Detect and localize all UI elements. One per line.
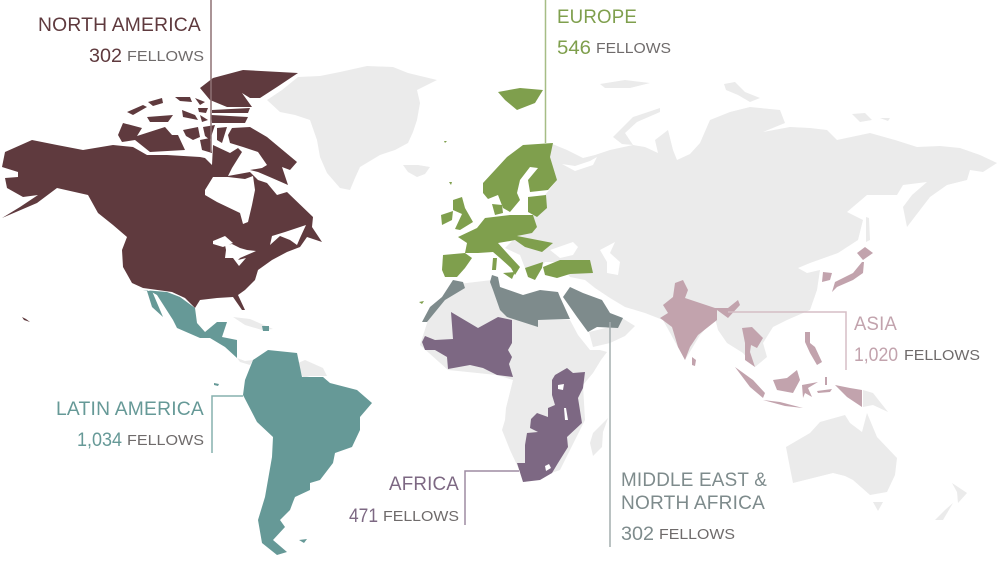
label: Middle East and North Africa xyxy=(621,470,767,545)
North America water bodies xyxy=(205,176,306,266)
label: Asia: 1,020 xyxy=(854,345,898,366)
base map: non-highlighted land xyxy=(233,66,997,520)
region: Latin America xyxy=(143,290,372,555)
label: Middle East and North Africa: FELLOWS xyxy=(659,526,735,543)
label: Europe: FELLOWS xyxy=(596,40,671,57)
leader line: Latin America xyxy=(212,396,243,453)
region: Asia xyxy=(660,247,873,408)
inland seas on base map xyxy=(550,157,838,275)
leader line: North America xyxy=(210,0,212,152)
region: Middle East and North Africa xyxy=(422,275,623,332)
label: Asia: ASIA xyxy=(854,314,897,335)
label: Europe xyxy=(557,7,671,59)
label: Africa: FELLOWS xyxy=(383,508,459,525)
label: Asia: FELLOWS xyxy=(904,347,980,364)
label: Latin America: FELLOWS xyxy=(127,432,204,449)
label: Europe: EUROPE xyxy=(557,7,637,28)
region: North America xyxy=(2,70,322,322)
leader line: Middle East and North Africa xyxy=(609,322,611,547)
region: Africa xyxy=(422,312,585,482)
label: Europe: 546 xyxy=(557,38,591,59)
label: North America: 302 xyxy=(89,46,122,67)
label: Latin America: LATIN AMERICA xyxy=(56,399,204,420)
label: Africa xyxy=(349,474,459,527)
label: Middle East and North Africa: NORTH AFRICA xyxy=(621,493,765,514)
label: Asia xyxy=(854,314,980,366)
label: Latin America: 1,034 xyxy=(77,430,122,451)
leader line: Asia xyxy=(728,312,846,370)
region: Europe xyxy=(419,88,593,304)
label: Middle East and North Africa: MIDDLE EAST & xyxy=(621,470,767,491)
African lakes and enclaves xyxy=(545,384,568,471)
label: North America: NORTH AMERICA xyxy=(38,15,201,36)
leader line: Europe xyxy=(544,0,546,143)
label: Africa: AFRICA xyxy=(389,474,459,495)
leader line: Africa xyxy=(465,471,519,525)
label: Middle East and North Africa: 302 xyxy=(621,524,654,545)
label: Latin America xyxy=(56,399,204,451)
label: North America: FELLOWS xyxy=(127,48,204,65)
label: North America xyxy=(38,15,204,67)
label: Africa: 471 xyxy=(349,506,378,527)
